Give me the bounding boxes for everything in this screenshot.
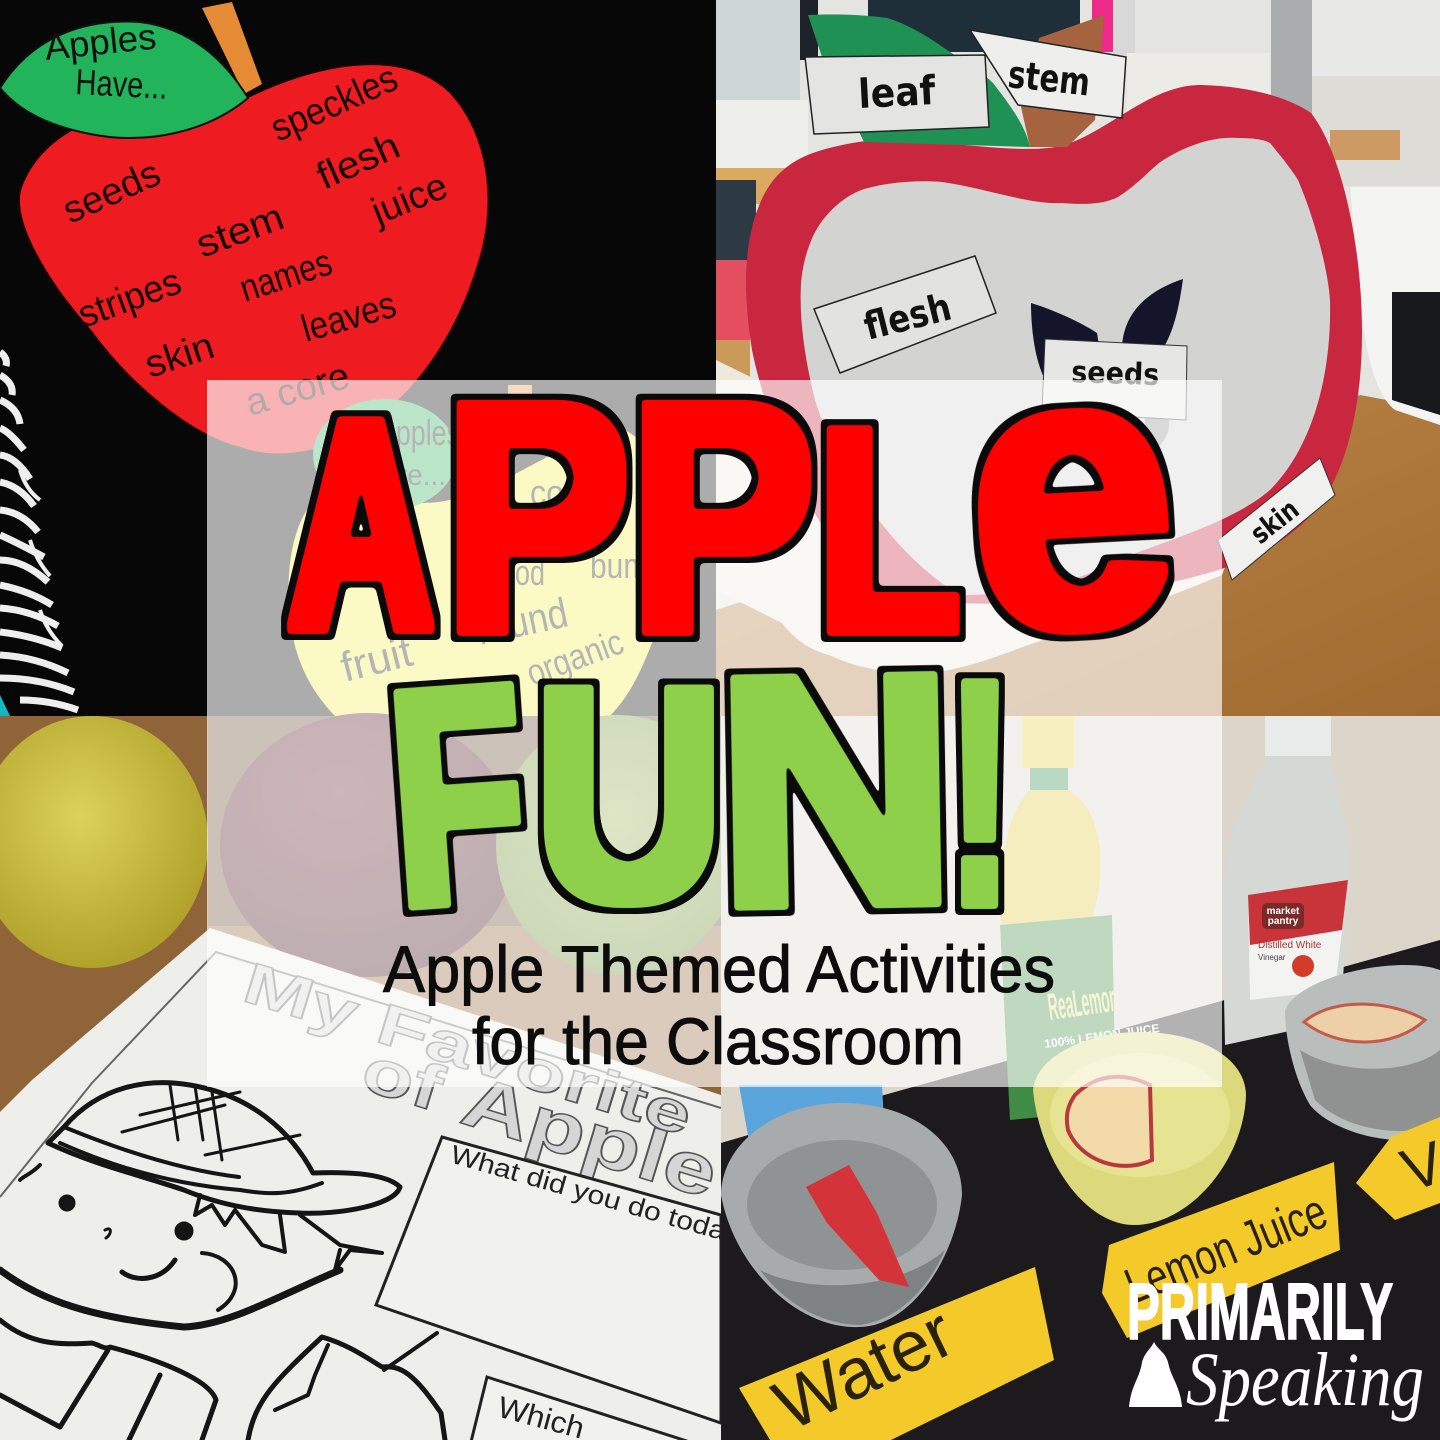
translucent centre overlay <box>207 380 1222 1087</box>
title: APPLE: L <box>817 369 961 692</box>
label: leaf: leaf <box>857 68 937 118</box>
vinegar bottle: Distilled White <box>1258 940 1322 951</box>
red apple poster: seeds <box>57 152 167 232</box>
subtitle: Apple Themed Activities <box>383 932 1055 1006</box>
red apple poster: juice <box>365 165 454 234</box>
yellow apple poster <box>288 385 673 716</box>
red apple poster: a core <box>241 355 354 425</box>
title: FUN!: N <box>713 607 959 975</box>
background: bulletin board <box>716 0 800 100</box>
decoration: zebra border <box>0 352 78 716</box>
title: APPLE <box>288 266 1185 714</box>
place card: lemon juice: Lemon Juice <box>1117 1183 1335 1314</box>
background: monitors <box>800 0 1135 60</box>
worksheet: Apple <box>453 1061 727 1214</box>
bowl: vinegar <box>1285 965 1440 1140</box>
red apple poster: names <box>235 242 337 311</box>
red apple poster: Have... <box>75 61 169 107</box>
bowl: water <box>721 1103 962 1327</box>
icon: school bell <box>1129 1342 1182 1407</box>
label: seeds: seeds <box>1071 355 1160 393</box>
label: skin <box>1218 458 1335 580</box>
yellow apple poster: Apples <box>378 412 460 453</box>
title: APPLE: e <box>957 266 1185 714</box>
white base <box>716 360 1250 673</box>
second box <box>469 1377 721 1440</box>
worksheet: What did you do toda <box>447 1139 730 1246</box>
label: leaf <box>805 55 989 134</box>
title: FUN!: F <box>381 620 535 970</box>
vinegar bottle <box>1222 716 1350 1045</box>
writing box <box>376 1137 721 1423</box>
vinegar bottle: pantry <box>1268 916 1299 927</box>
red apple poster: leaves <box>297 284 401 351</box>
panel: apple poster on black background <box>0 0 716 716</box>
red apple poster: flesh <box>311 125 406 198</box>
yellow apple poster: round <box>472 589 572 654</box>
panel: paper apple model in office <box>716 0 1440 716</box>
red apple model <box>746 85 1362 604</box>
wooden desk <box>716 395 1440 716</box>
place card: vinegar <box>1356 1117 1440 1220</box>
seed shapes <box>1031 303 1099 380</box>
lemon juice bottle <box>1000 716 1160 1120</box>
leaf <box>0 22 248 138</box>
stem <box>202 2 262 94</box>
label: skin: skin <box>1244 492 1305 551</box>
lemon juice bottle: 100% LEMON JUICE <box>1043 1021 1160 1051</box>
drawing: child with hat <box>0 1083 445 1440</box>
vinegar bottle: Vinegar <box>1258 953 1286 962</box>
subtitle <box>383 932 1055 1078</box>
red apple poster: speckles <box>265 57 404 150</box>
small water bottle <box>739 1085 885 1175</box>
title: FUN!: U <box>534 626 724 964</box>
yellow apple poster: bump <box>590 545 665 586</box>
label: seeds <box>1042 339 1187 420</box>
red apple poster <box>0 2 489 454</box>
red apple poster: skin <box>140 325 219 387</box>
background: desks and shelves <box>716 0 1440 420</box>
table <box>721 940 1440 1440</box>
yellow apple poster: od <box>515 552 545 593</box>
place card: water <box>739 1267 1054 1440</box>
yellow apple poster: re... <box>398 459 446 492</box>
yellow apple poster: color <box>530 472 600 513</box>
worksheet: of <box>354 1033 452 1125</box>
label: flesh: flesh <box>860 285 956 349</box>
title: FUN!: ! <box>950 616 1010 971</box>
yellow apple poster: fruit <box>336 628 417 691</box>
red apple poster: Apples <box>43 15 158 68</box>
projector <box>1350 187 1440 425</box>
title: FUN! <box>381 607 1010 975</box>
apples on table <box>0 713 740 977</box>
panel: worksheet and apples <box>0 713 740 1440</box>
yellow apple poster: organic <box>521 621 629 694</box>
red apple poster: stripes <box>73 261 187 336</box>
paper stem <box>1021 15 1104 147</box>
worksheet: My Favorite <box>236 950 700 1148</box>
title: APPLE: P <box>629 336 815 700</box>
paper leaf <box>808 14 1030 147</box>
panel: apple oxidation experiment <box>721 716 1440 1440</box>
bowl: lemon juice <box>1033 1032 1246 1225</box>
label: flesh <box>814 256 996 373</box>
red apple poster: stem <box>191 196 290 266</box>
subtitle: for the Classroom <box>472 1004 964 1078</box>
vinegar bottle: market <box>1267 906 1300 917</box>
logo: Primarily Speaking <box>1127 1267 1424 1422</box>
worksheet <box>0 928 730 1440</box>
title: APPLE: P <box>444 336 630 700</box>
label: stem: stem <box>1006 52 1092 105</box>
place card: lemon juice <box>1102 1162 1340 1338</box>
lemon juice bottle: ReaLemon <box>1045 978 1121 1029</box>
title: APPLE: A <box>288 358 434 692</box>
label: stem <box>970 30 1126 118</box>
